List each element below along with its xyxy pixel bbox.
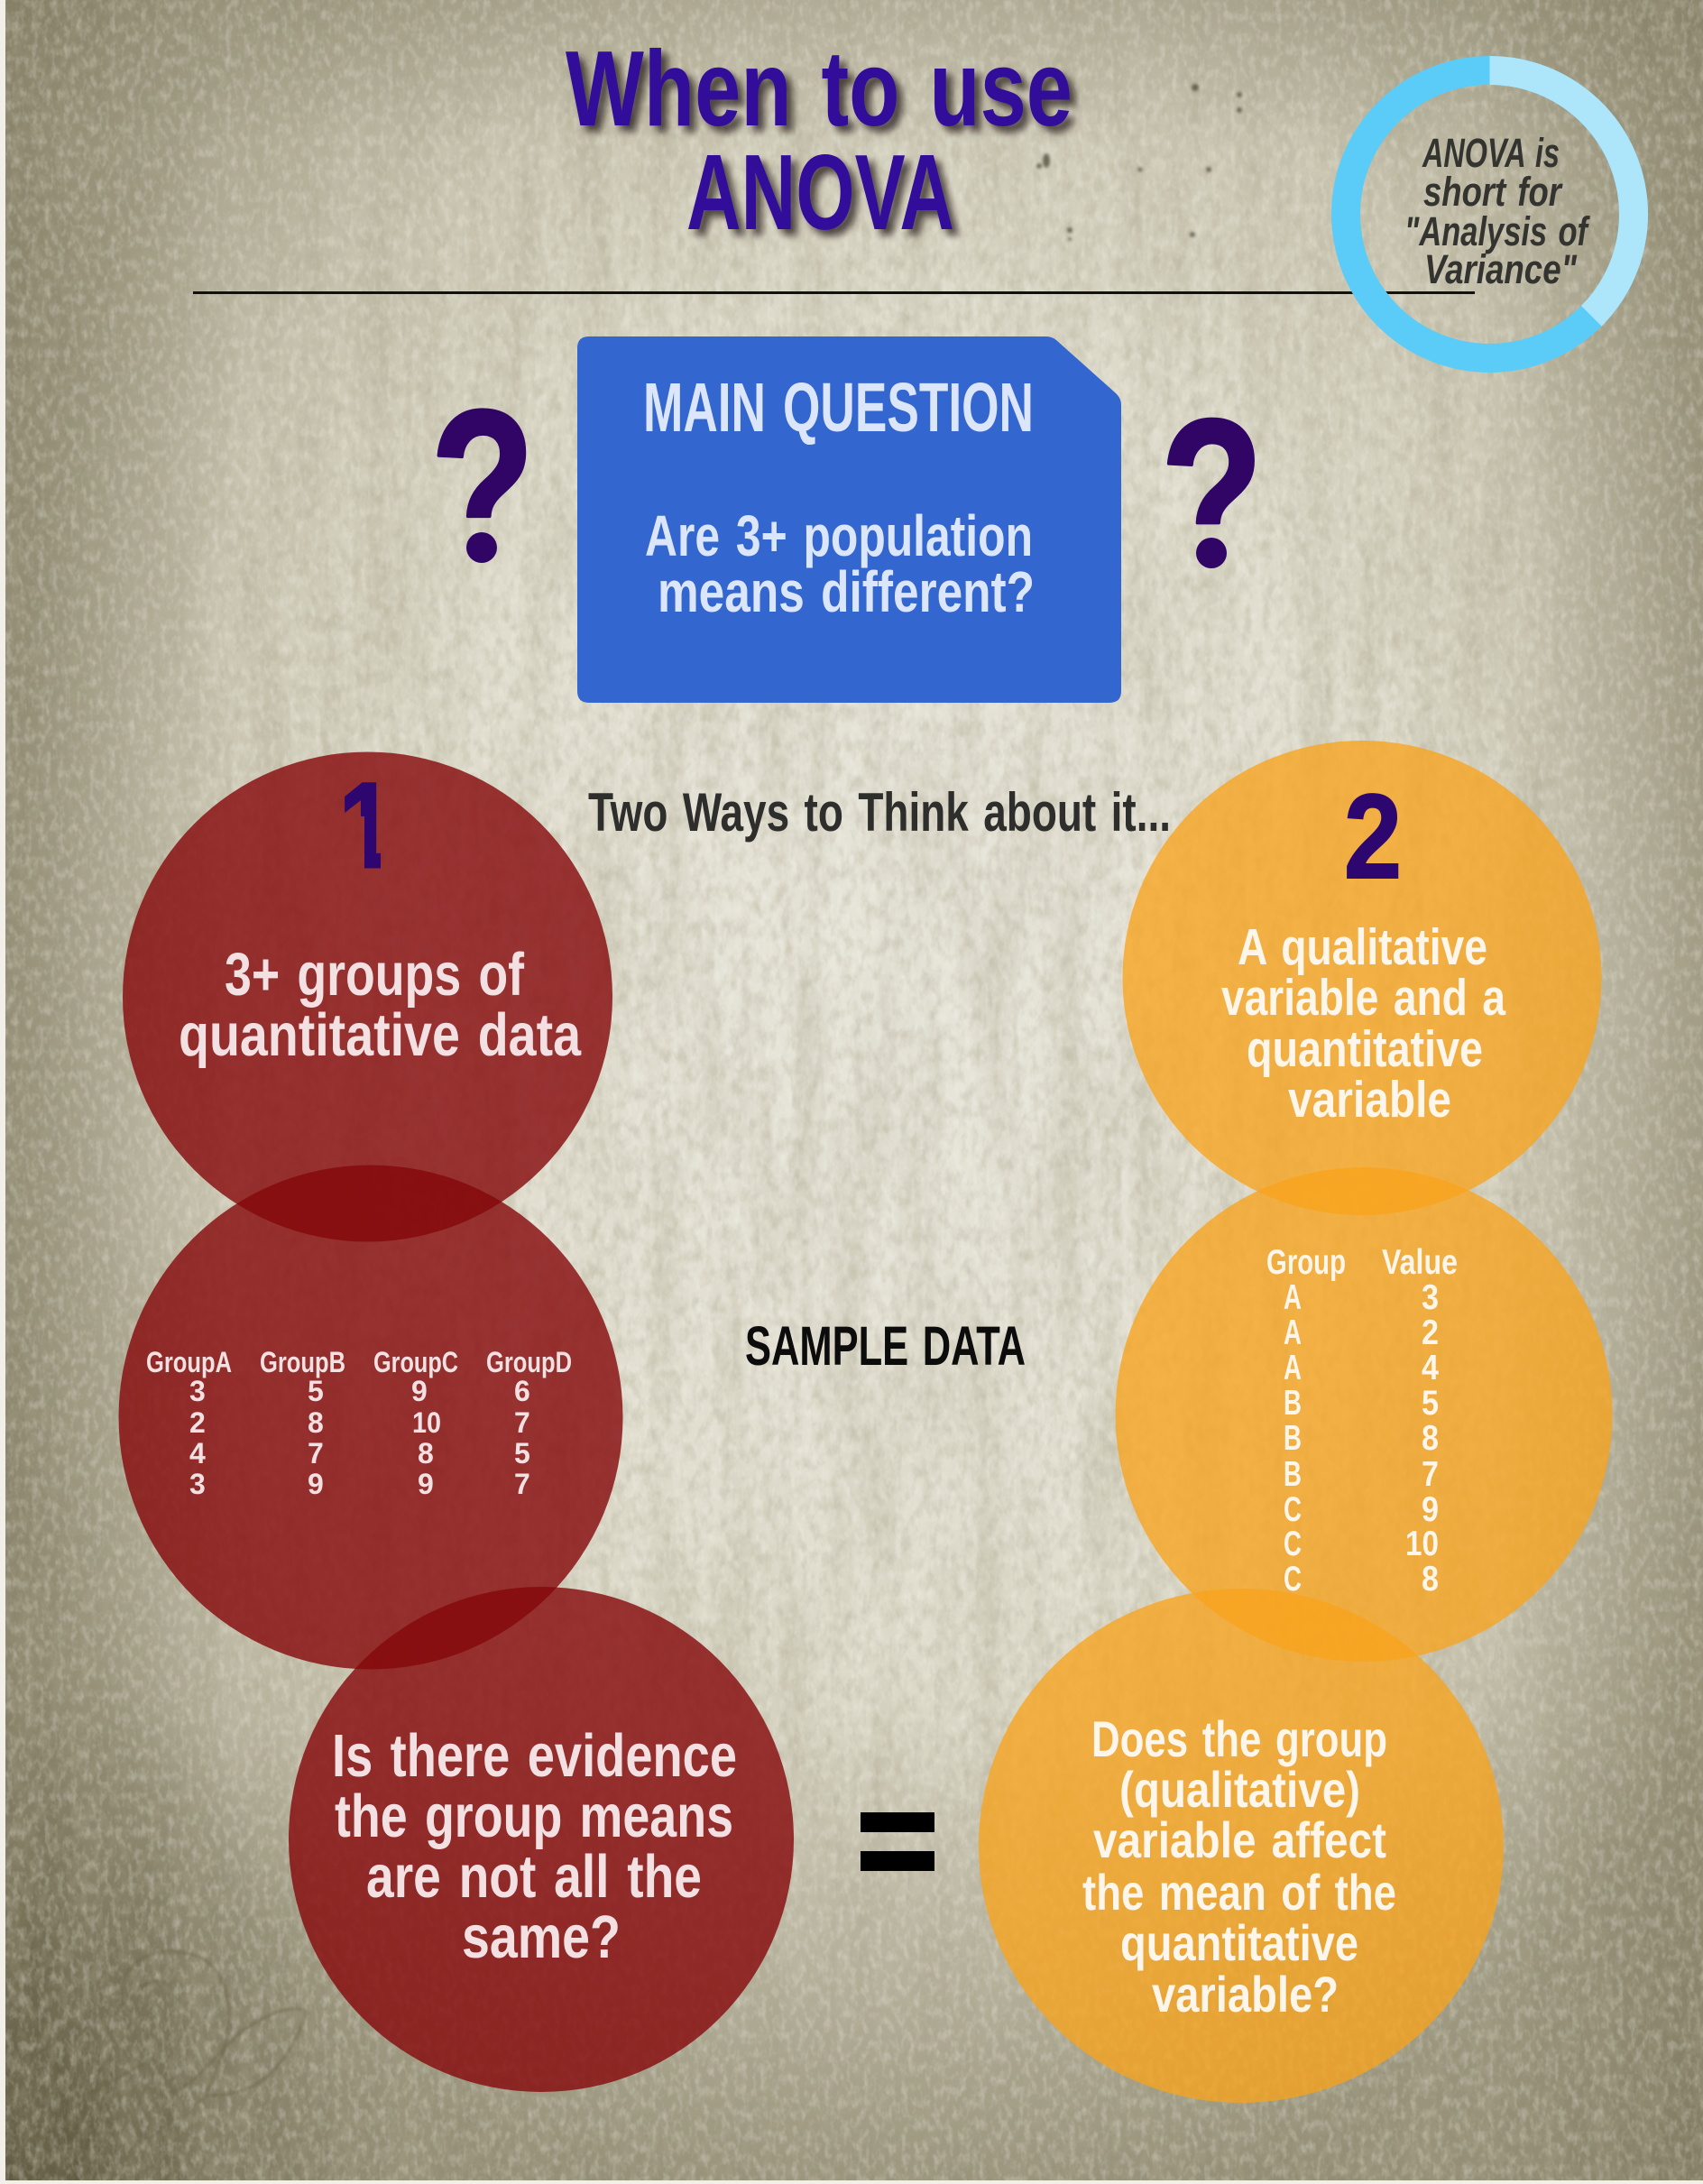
circle: way 2 sample data table: C [1284,1525,1302,1563]
circle: way 1 sample data table: 4 [189,1437,206,1470]
circle: way 2 sample data table: A [1284,1349,1302,1387]
circle: way 2 question: (qualitative) [1119,1761,1360,1818]
circle: way 1 sample data table: 9 [411,1375,428,1407]
circle: way 2 description: A qualitative [1238,918,1487,976]
circle: way 2 sample data table: Value [1382,1243,1458,1282]
circle: way 1 sample data table: 3 [189,1468,206,1500]
icon: equals sign [861,1812,934,1871]
panel: main question: MAIN QUESTION [643,369,1034,447]
circle: way 1 sample data table: 2 [189,1406,206,1439]
circle: way 1 question: Is there evidence [332,1722,737,1790]
circle: way 2 sample data table: 8 [1422,1560,1439,1599]
circle: way 1 sample data table: GroupA [146,1346,232,1378]
circle: way 1 sample data table: 8 [418,1437,434,1470]
callout ring: ANOVA definition [1346,70,1634,358]
icon: right question mark: ? [1161,375,1263,612]
circle: way 2 sample data table: A [1284,1313,1302,1352]
circle: way 2 sample data table: 7 [1422,1455,1439,1494]
circle: way 1 sample data table: 7 [308,1437,324,1470]
circle: way 1 sample data table: GroupD [486,1346,572,1378]
circle: way 2 sample data table: C [1284,1560,1302,1599]
callout ring: ANOVA definition: Variance" [1424,246,1578,292]
number 2: 2 [1344,770,1402,904]
circle: way 2 description: variable and a [1221,969,1506,1027]
circle: way 2 question: variable affect [1093,1811,1386,1868]
callout ring: ANOVA definition: "Analysis of [1404,208,1590,254]
title: ANOVA [686,133,954,253]
circle: way 1 sample data table: GroupB [260,1346,345,1378]
callout ring: ANOVA definition: ANOVA is [1422,130,1560,176]
circle: way 1 sample data table: 7 [514,1468,530,1500]
circle: way 2 description: quantitative [1247,1020,1483,1078]
callout ring: ANOVA definition: short for [1423,169,1563,215]
circle: way 2 sample data table [1115,1167,1613,1662]
circle: way 2 sample data table: 8 [1422,1419,1439,1458]
circle: way 1 description: quantitative data [179,1001,582,1069]
circle: way 1 question [289,1587,794,2092]
divider line [193,291,1475,294]
number 1: 1 [339,759,393,893]
circle: way 2 sample data table: 5 [1422,1384,1439,1423]
circle: way 2 question [979,1589,1504,2103]
panel: main question: Are 3+ population [645,503,1033,568]
circle: way 1 sample data table: 6 [514,1375,530,1407]
circle: way 1 description: 3+ groups of [225,941,525,1009]
circle: way 2 question: Does the group [1091,1710,1387,1767]
circle: way 1 sample data table [119,1166,622,1669]
icon: right question mark [1167,417,1255,568]
panel: main question [577,336,1121,703]
circle: way 1 sample data table: 9 [308,1468,324,1500]
circle: way 2 question: the mean of the [1082,1864,1396,1921]
circle: way 1 sample data table: 5 [514,1437,530,1470]
circle: way 2 sample data table: B [1284,1419,1302,1458]
circle: way 1 sample data table: GroupC [373,1346,458,1378]
circle: way 2 sample data table: 4 [1422,1349,1439,1387]
title [566,29,1072,253]
circle: way 2 sample data table: 10 [1405,1525,1439,1563]
circle: way 2 sample data table: A [1284,1278,1302,1317]
circle: way 2 question: quantitative [1120,1914,1358,1971]
icon: left question mark: ? [431,365,534,607]
circle: way 1 sample data table: 8 [308,1406,324,1439]
circle: way 1 question: same? [462,1903,621,1971]
circle: way 1 sample data table: 5 [308,1375,324,1407]
circle: way 1 question: are not all the [366,1843,702,1911]
circle: way 2 description: variable [1288,1071,1451,1129]
circle: way 2 question: variable? [1152,1966,1339,2023]
circle: way 2 description [1122,741,1602,1215]
circle: way 2 sample data table: Group [1266,1243,1346,1282]
circle: way 2 sample data table: B [1284,1384,1302,1423]
circle: way 2 sample data table: B [1284,1455,1302,1494]
circle: way 2 sample data table: 3 [1422,1278,1439,1317]
circle: way 2 sample data table: 9 [1422,1490,1439,1529]
label: sample data: SAMPLE DATA [745,1315,1026,1377]
circle: way 1 sample data table: 10 [412,1406,441,1439]
circle: way 1 question: the group means [335,1783,733,1850]
title: When to use [566,29,1072,149]
heading: two ways: Two Ways to Think about it... [588,782,1171,843]
circle: way 1 sample data table: 3 [189,1375,206,1407]
circle: way 1 description [123,752,612,1241]
panel: main question: means different? [658,559,1035,624]
circle: way 2 sample data table: 2 [1422,1313,1439,1352]
circle: way 2 sample data table: C [1284,1490,1302,1529]
circle: way 1 sample data table: 9 [418,1468,434,1500]
circle: way 1 sample data table: 7 [514,1406,530,1439]
icon: left question mark [437,408,527,563]
